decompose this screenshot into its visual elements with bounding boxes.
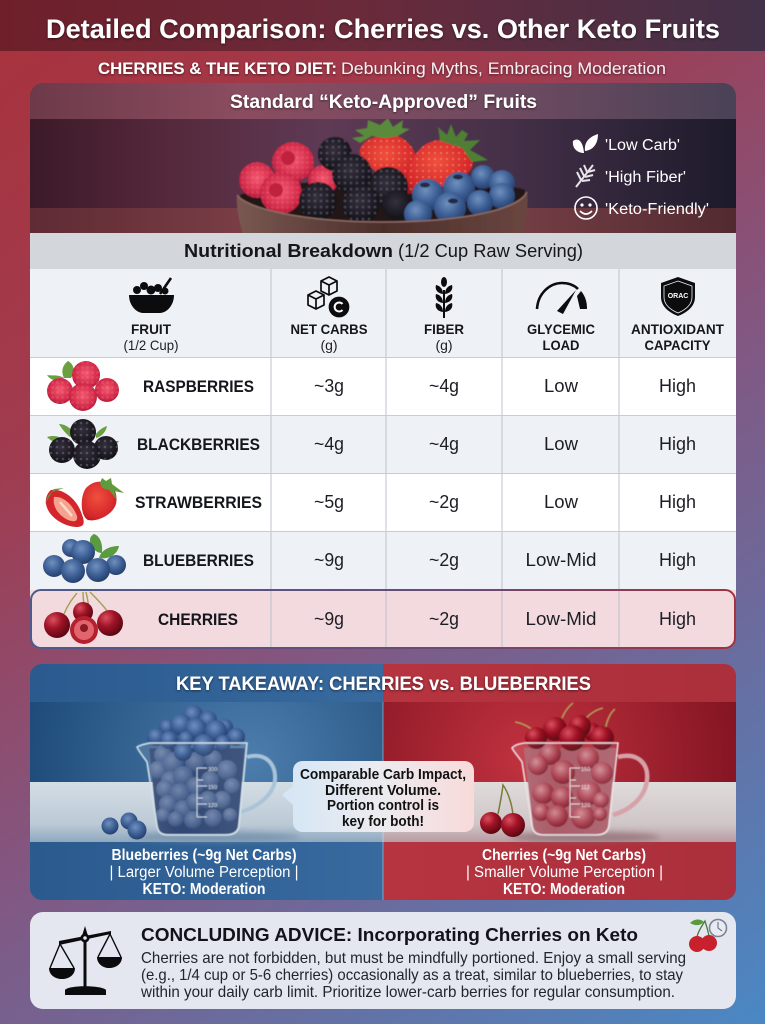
icon: blueberries: [43, 534, 126, 583]
row: raspberries: Low: [544, 376, 579, 396]
row: blackberries: Low: [544, 434, 579, 454]
hero claims list: [573, 134, 709, 219]
icon: measuring jug of cherries: [512, 703, 647, 835]
row: blackberries: BLACKBERRIES: [137, 436, 260, 454]
row: strawberries: ~5g: [314, 492, 344, 512]
table header row: FIBER: [424, 321, 464, 337]
hero claims list: 'Low Carb': [605, 137, 680, 154]
row: raspberries: ~4g: [429, 376, 459, 396]
caption: cherries: | Smaller Volume Perception |: [466, 864, 663, 881]
icon: measuring jug of blueberries: 120: [208, 803, 217, 809]
callout: comparable carb impact: Portion control is: [327, 797, 439, 814]
icon: strawberries: [45, 478, 124, 527]
row: cherries (highlighted): Low-Mid: [526, 609, 596, 629]
caption: blueberries: Blueberries (~9g Net Carbs): [112, 847, 296, 864]
row: blueberries: Low-Mid: [526, 550, 596, 570]
icon: cherries and clock: [689, 919, 726, 952]
concluding body text: within your daily carb limit. Prioritize lower-carb berries for regular consumption.: [140, 984, 675, 1001]
concluding body text: [140, 950, 686, 1001]
callout: comparable carb impact: key for both!: [342, 813, 424, 830]
table heading: (1/2 Cup Raw Serving): [398, 240, 583, 261]
left scene: blueberries: [30, 664, 383, 900]
row: cherries (highlighted): [30, 590, 736, 649]
caption: cherries: [467, 848, 662, 894]
panel: key takeaway: [30, 664, 736, 900]
hero claims list: 'High Fiber': [605, 169, 686, 186]
icon: raspberries: [47, 361, 119, 411]
icon: net carb cubes: [308, 277, 348, 316]
row: blueberries: BLUEBERRIES: [143, 552, 254, 570]
row: strawberries: High: [659, 492, 696, 512]
icon: fiber wheat: [436, 277, 452, 318]
table header row: (g): [320, 337, 338, 353]
row: blackberries: ~4g: [429, 434, 459, 454]
blackberries: [299, 137, 412, 223]
row: strawberries: [30, 474, 736, 532]
row: cherries (highlighted): High: [659, 609, 696, 629]
caption: cherries: KETO: Moderation: [503, 881, 625, 898]
icon: wheat: [576, 165, 595, 187]
callout: comparable carb impact: Different Volume.: [325, 782, 441, 799]
panel heading: Standard Keto-Approved Fruits: [30, 83, 736, 119]
icon: measuring jug of blueberries: 150: [208, 785, 217, 791]
icon: ORAC shield: ORAC: [668, 293, 688, 300]
icon: cherries: [44, 592, 123, 644]
panel: concluding advice: [30, 912, 736, 1009]
row: cherries (highlighted): ~9g: [314, 609, 344, 629]
icon: smiley: [575, 197, 597, 219]
row: blueberries: [30, 532, 736, 590]
row: blackberries: High: [659, 434, 696, 454]
icon: leaf: [573, 134, 598, 153]
row: raspberries: ~3g: [314, 376, 344, 396]
title banner: [0, 0, 765, 51]
caption: blueberries: | Larger Volume Perception |: [110, 864, 298, 881]
subtitle: [98, 59, 666, 78]
hero photo: bowl of berries: [30, 118, 736, 234]
highlight outline around cherries row: [31, 590, 735, 648]
panel: keto-approved fruits and table: [30, 83, 736, 649]
table heading: [30, 233, 736, 269]
row: raspberries: RASPBERRIES: [143, 378, 254, 396]
table header row: GLYCEMIC: [527, 321, 595, 337]
panel heading: Standard Keto-Approved Fruits: Standard “Keto-Approved” Fruits: [230, 92, 537, 113]
row: cherries (highlighted): ~2g: [429, 609, 459, 629]
table header row: FRUIT: [131, 321, 171, 337]
right scene: cherries: [383, 664, 736, 900]
table header row: (g): [435, 337, 453, 353]
icon: measuring jug of blueberries: 300: [208, 767, 217, 773]
row: blueberries: ~2g: [429, 550, 459, 570]
concluding heading: CONCLUDING ADVICE: Incorporating Cherries on Keto: [141, 924, 638, 945]
title: Detailed Comparison: Cherries vs. Other Keto Fruits: [46, 14, 720, 44]
subtitle: CHERRIES & THE KETO DIET:: [98, 59, 337, 78]
row: strawberries: Low: [544, 492, 579, 512]
table header row: CAPACITY: [644, 337, 711, 353]
table header row: ANTIOXIDANT: [631, 321, 724, 337]
icon: ORAC shield: [661, 277, 695, 316]
table header row: NET CARBS: [290, 321, 368, 337]
row: raspberries: [30, 358, 736, 416]
icon: measuring jug of cherries: 150: [581, 767, 590, 773]
row: blackberries: [30, 416, 736, 474]
blueberries: [404, 165, 515, 228]
table header row: LOAD: [542, 337, 580, 353]
row: strawberries: STRAWBERRIES: [135, 494, 262, 512]
icon: measuring jug of cherries: 112: [581, 785, 590, 791]
icon: measuring jug of blueberries: [137, 705, 275, 835]
icon: blackberries: [47, 419, 119, 469]
callout: comparable carb impact: [282, 761, 474, 832]
table heading: Nutritional Breakdown: [184, 240, 393, 261]
row: strawberries: ~2g: [429, 492, 459, 512]
table header row: [30, 269, 736, 358]
icon: loose blueberries: [102, 812, 146, 840]
key takeaway heading: KEY TAKEAWAY: CHERRIES vs. BLUEBERRIES: [176, 674, 591, 695]
table: nutritional breakdown: [30, 233, 736, 649]
row: blueberries: High: [659, 550, 696, 570]
bowl: [237, 192, 528, 234]
hero claims list: 'Keto-Friendly': [605, 201, 709, 218]
row: blueberries: ~9g: [314, 550, 344, 570]
table header row: (1/2 Cup): [124, 337, 178, 353]
row: raspberries: High: [659, 376, 696, 396]
concluding body text: (e.g., 1/4 cup or 5-6 cherries) occasionally as a treat, similar to blueberries, to stay: [141, 967, 683, 984]
strawberries: [352, 118, 488, 194]
subtitle: Debunking Myths, Embracing Moderation: [341, 59, 666, 78]
caption: blueberries: KETO: Moderation: [142, 881, 266, 898]
icon: loose cherry pair: [480, 785, 525, 837]
caption: blueberries: [110, 848, 298, 894]
callout: comparable carb impact: Comparable Carb Impact,: [300, 766, 466, 783]
row: cherries (highlighted): CHERRIES: [158, 611, 238, 629]
icon: bowl: [129, 278, 174, 313]
caption: cherries: Cherries (~9g Net Carbs): [482, 847, 646, 864]
raspberries: [239, 142, 338, 214]
icon: balance scales: [49, 926, 122, 995]
icon: glycemic gauge: [537, 283, 587, 314]
icon: measuring jug of cherries: 120: [581, 803, 590, 809]
row: blackberries: ~4g: [314, 434, 344, 454]
concluding body text: Cherries are not forbidden, but must be mindfully portioned. Enjoy a small serving: [141, 950, 686, 967]
